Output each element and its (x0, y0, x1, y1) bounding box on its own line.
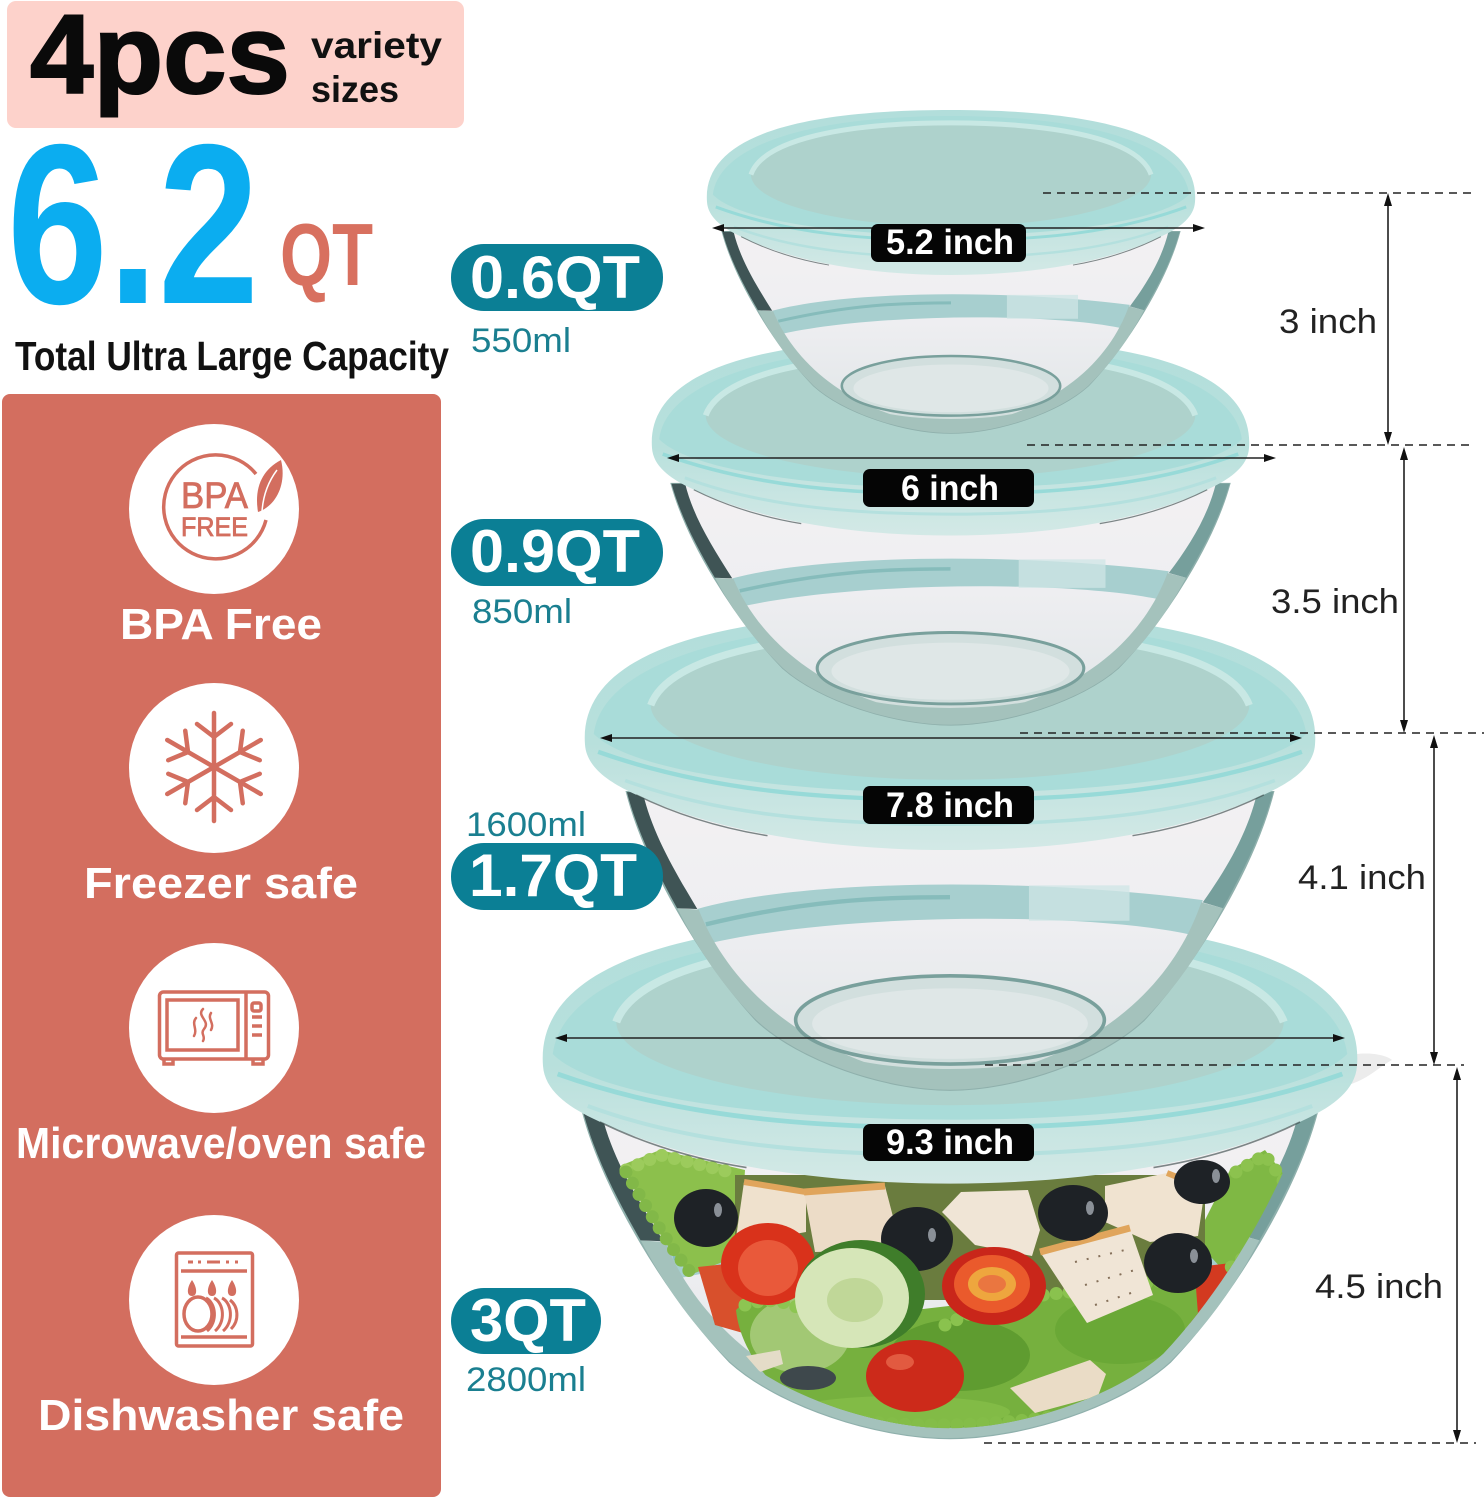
capacity tag: 3QT 2800ml (451, 1287, 601, 1399)
capacity tag: 0.9QT 850ml: 0.9QT (470, 518, 640, 585)
badge: 4pcs variety sizes (7, 0, 464, 128)
cucumber (797, 1240, 925, 1348)
lettuce left (622, 1150, 745, 1275)
label: Microwave/oven safe: Microwave/oven safe (16, 1119, 426, 1168)
capacity tag: 3QT 2800ml: 3QT (470, 1287, 586, 1354)
bowl: small 0.9QT (652, 338, 1249, 725)
tomatoes (721, 1223, 815, 1305)
height arrow: 4.5 inch: 4.5 inch (1315, 1268, 1443, 1306)
icon: BPA free: BPA (181, 475, 248, 516)
height guide lines (984, 193, 1484, 1443)
label: BPA Free: BPA Free (120, 600, 322, 649)
height arrow: 3 inch: 3 inch (1279, 303, 1377, 341)
diameter arrow: 6 inch (667, 454, 1276, 508)
capacity tag: 0.6QT 550ml: 550ml (471, 322, 571, 360)
height arrow: 3.5 inch (1271, 447, 1408, 733)
icon: snowflake (129, 683, 299, 853)
height arrow: 3.5 inch: 3.5 inch (1271, 583, 1399, 621)
height arrow: 4.1 inch (1298, 735, 1438, 1065)
badge: 4pcs variety sizes: sizes (311, 69, 399, 110)
capacity tag: 1.7QT 1600ml: 1.7QT (469, 842, 637, 909)
olives (674, 1160, 1230, 1293)
bowl: large 3QT with salad (543, 918, 1392, 1438)
capacity tag: 3QT 2800ml: 2800ml (466, 1361, 586, 1399)
capacity tag: 0.6QT 550ml: 0.6QT (470, 244, 640, 311)
diameter arrow: 9.3 inch: 9.3 inch (886, 1123, 1014, 1162)
panel: safety features (2, 394, 441, 1497)
icon: BPA free (129, 424, 299, 594)
capacity tag: 1.7QT 1600ml: 1600ml (466, 806, 586, 844)
badge: 4pcs variety sizes: variety (311, 25, 442, 66)
tofu cubes (735, 1173, 1205, 1413)
icon: microwave (129, 943, 299, 1113)
label: Dishwasher safe: Dishwasher safe (38, 1391, 404, 1440)
diameter arrow: 7.8 inch: 7.8 inch (886, 786, 1014, 825)
diameter arrow: 7.8 inch (600, 734, 1302, 825)
height arrow: 4.5 inch (1315, 1067, 1461, 1443)
height arrow: 3 inch (1279, 193, 1392, 445)
diameter arrow: 6 inch: 6 inch (901, 469, 999, 508)
capacity tag: 0.6QT 550ml (451, 244, 663, 360)
icon: BPA free: FREE (181, 512, 248, 542)
diameter arrow: 9.3 inch (555, 1034, 1345, 1162)
heading: total capacity 6.2 QT: QT (280, 205, 373, 304)
capacity tag: 0.9QT 850ml: 850ml (472, 593, 572, 631)
subheading: total ultra large capacity: Total Ultra Large Capacity (15, 333, 449, 379)
height arrow: 4.1 inch: 4.1 inch (1298, 859, 1426, 897)
capacity tag: 0.9QT 850ml (451, 518, 663, 631)
heading: total capacity 6.2 QT: 6.2 (7, 98, 259, 352)
diameter arrow: 5.2 inch: 5.2 inch (886, 223, 1014, 262)
bowl: smallest 0.6QT (707, 110, 1195, 433)
label: Freezer safe: Freezer safe (84, 859, 358, 908)
shadow behind (735, 1175, 1205, 1300)
red bits (698, 1264, 744, 1332)
lettuce frills (626, 1155, 1284, 1425)
salad (622, 1150, 1288, 1428)
diameter arrow: 5.2 inch (712, 223, 1205, 262)
capacity tag: 1.7QT 1600ml (451, 806, 663, 910)
lettuce right (1205, 1150, 1283, 1269)
bowl: medium 1.7QT (585, 612, 1315, 1090)
icon: dishwasher (129, 1215, 299, 1385)
lettuce lower (736, 1275, 1200, 1428)
